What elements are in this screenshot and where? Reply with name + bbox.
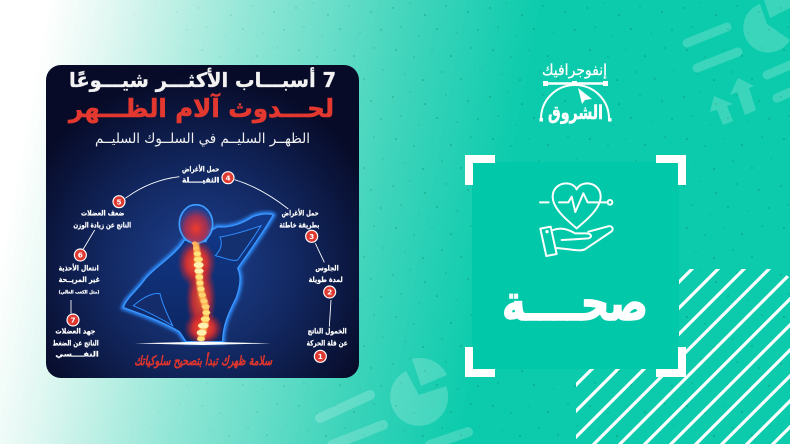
connector lines	[71, 177, 331, 327]
cause labels: الناتج عن زيادة الوزن	[73, 220, 131, 229]
poster title line 2: لحـــدوث آلام الظـــهر	[67, 93, 334, 124]
cause labels: بطريقة خاطئة	[279, 220, 320, 229]
cause labels: حمل الأغراض	[282, 208, 319, 217]
logo main word: الشروق	[548, 102, 603, 124]
cause labels: جهد العضلات	[55, 327, 95, 336]
figure and diagram	[53, 165, 348, 369]
badge numbers: 1	[318, 352, 323, 361]
badge numbers: 4	[225, 173, 231, 182]
badge numbers	[70, 173, 332, 361]
cause labels: لمدة طويلة	[309, 275, 343, 284]
cause labels: عن قلة الحركة	[307, 338, 348, 347]
category word: health: صحــــة	[502, 274, 648, 332]
floor line	[134, 342, 271, 345]
panel: health category card	[465, 155, 686, 377]
corner brackets	[465, 155, 686, 377]
cause labels: الخمول الناتج	[308, 327, 347, 336]
badge numbers: 2	[327, 288, 332, 297]
logo top word: إنفوجرافيك	[542, 61, 607, 79]
badge numbers: 7	[70, 316, 76, 325]
cause labels: انتعال الأحذية	[59, 263, 99, 272]
decorative icons top right	[687, 0, 790, 125]
cause labels: (مثل الكعب العالي)	[59, 289, 99, 295]
number badges	[67, 172, 336, 362]
cause labels: الناتج عن الضغط	[53, 338, 99, 347]
badge numbers: 3	[309, 232, 314, 241]
badge numbers: 6	[78, 251, 83, 260]
badge numbers: 5	[116, 197, 122, 206]
poster caption: سلامة ظهرك تبدأ بتصحيح سلوكياتك	[134, 352, 273, 369]
logo bezier arc and handles	[540, 81, 612, 122]
cause labels: ضعف العضلات	[81, 208, 124, 217]
cause labels: الثقيـــــلة	[182, 176, 219, 185]
cause labels: غير المريــحة	[59, 275, 100, 284]
decorative icons bottom	[320, 358, 468, 444]
panel: infographic poster	[46, 65, 359, 378]
human body figure	[123, 205, 273, 345]
cause labels: حمل الأغراض	[182, 165, 219, 174]
cause labels: الجلوس	[315, 263, 339, 272]
poster subtitle: الظهــر السليــم في السلــوك السليــم	[95, 131, 310, 147]
poster title line 1: 7 أسبـــاب الأكثـــر شيـــوعًا	[69, 66, 336, 92]
cause labels	[53, 165, 348, 359]
icon: heart in caring hand	[540, 183, 613, 256]
logo: Shorouk infographic	[540, 61, 612, 124]
cause labels: النفــــسي	[55, 350, 99, 359]
diagonal stripes	[576, 269, 790, 444]
